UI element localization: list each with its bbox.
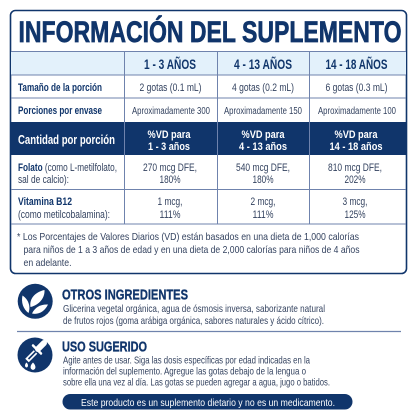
- row: serving size: Tamaño de la porción: [18, 82, 102, 94]
- row: serving size: 6 gotas (0.3 mL): [326, 82, 388, 94]
- row: vitamin B12: 125%: [344, 209, 366, 221]
- row: servings per container: Aproximadamente 100: [318, 106, 396, 117]
- row: vitamin B12: Vitamina B12: [18, 196, 72, 208]
- dark header row: amount per serving: [11, 122, 406, 155]
- row: servings per container: [18, 105, 396, 117]
- dark header row: amount per serving: 14 - 18 años: [330, 141, 382, 153]
- table header row: 14 - 18 AÑOS: [326, 57, 388, 72]
- row: folate: 180%: [160, 174, 181, 186]
- row: vitamin B12: [18, 196, 368, 221]
- row: folate: 540 mcg DFE,: [236, 162, 290, 174]
- row: servings per container: Aproximadamente 150: [224, 106, 302, 117]
- dark header row: amount per serving: Cantidad por porción: [18, 132, 115, 147]
- row: folate: 202%: [344, 174, 366, 186]
- footnote: [17, 231, 360, 269]
- table header row: 1 - 3 AÑOS: [144, 57, 196, 72]
- panel: supplement facts: [10, 10, 406, 274]
- callout: disclaimer pill: Este producto es un suplemento dietario y no es un medicamento.: [81, 397, 335, 409]
- row: servings per container: Aproximadamente 300: [132, 106, 210, 117]
- row: vitamin B12: 1 mcg,: [158, 196, 182, 208]
- text: ingredients: de frutos rojos (goma arábiga orgánica, sabores naturales y ácido cítrico).: [63, 315, 324, 327]
- table header row: [11, 52, 406, 75]
- icon: leaves: [18, 284, 53, 319]
- row: folate: 810 mcg DFE,: [328, 162, 382, 174]
- dark header row: amount per serving: %VD para: [242, 129, 285, 141]
- dark header row: amount per serving: 1 - 3 años: [148, 141, 190, 153]
- dark header row: amount per serving: 4 - 13 años: [239, 141, 287, 153]
- row: serving size: 2 gotas (0.1 mL): [140, 82, 202, 94]
- text: usage: información del suplemento. Agregue las gotas debajo de la lengua o: [63, 366, 306, 378]
- dark header row: amount per serving: %VD para: [148, 129, 191, 141]
- text: usage: [63, 354, 330, 388]
- table header row: 4 - 13 AÑOS: [234, 57, 292, 72]
- row: serving size: [18, 82, 388, 94]
- callout: disclaimer pill: [62, 394, 352, 410]
- row: folate: [18, 162, 382, 186]
- footnote: * Los Porcentajes de Valores Diarios (VD) están basados en una dieta de 1,000 calorías: [17, 231, 359, 243]
- row: vitamin B12: (como metilcobalamina):: [18, 209, 110, 221]
- row: serving size: 4 gotas (0.2 mL): [232, 82, 294, 94]
- row: folate: 270 mcg DFE,: [143, 162, 197, 174]
- row: folate: sal de calcio):: [18, 174, 69, 186]
- row: vitamin B12: 3 mcg,: [342, 196, 368, 208]
- text: ingredients: [63, 303, 325, 327]
- icon: dropper: [18, 338, 52, 372]
- row: vitamin B12: 111%: [160, 209, 181, 221]
- heading: other ingredients: OTROS INGREDIENTES: [62, 288, 188, 304]
- row: servings per container: Porciones por envase: [18, 105, 102, 117]
- dark header row: amount per serving: %VD para: [334, 129, 378, 141]
- row: vitamin B12: 2 mcg,: [250, 196, 276, 208]
- text: ingredients: Glicerina vegetal orgánica, agua de ósmosis inversa, saborizante natural: [63, 303, 325, 315]
- row: folate: 180%: [252, 174, 274, 186]
- row: vitamin B12: 111%: [252, 209, 274, 221]
- row: folate: Folato (como L-metilfolato,: [18, 162, 117, 174]
- footnote: en adelante.: [24, 257, 72, 269]
- heading: suggested use: USO SUGERIDO: [62, 340, 147, 356]
- text: usage: Agite antes de usar. Siga las dosis específicas por edad indicadas en la: [63, 354, 310, 366]
